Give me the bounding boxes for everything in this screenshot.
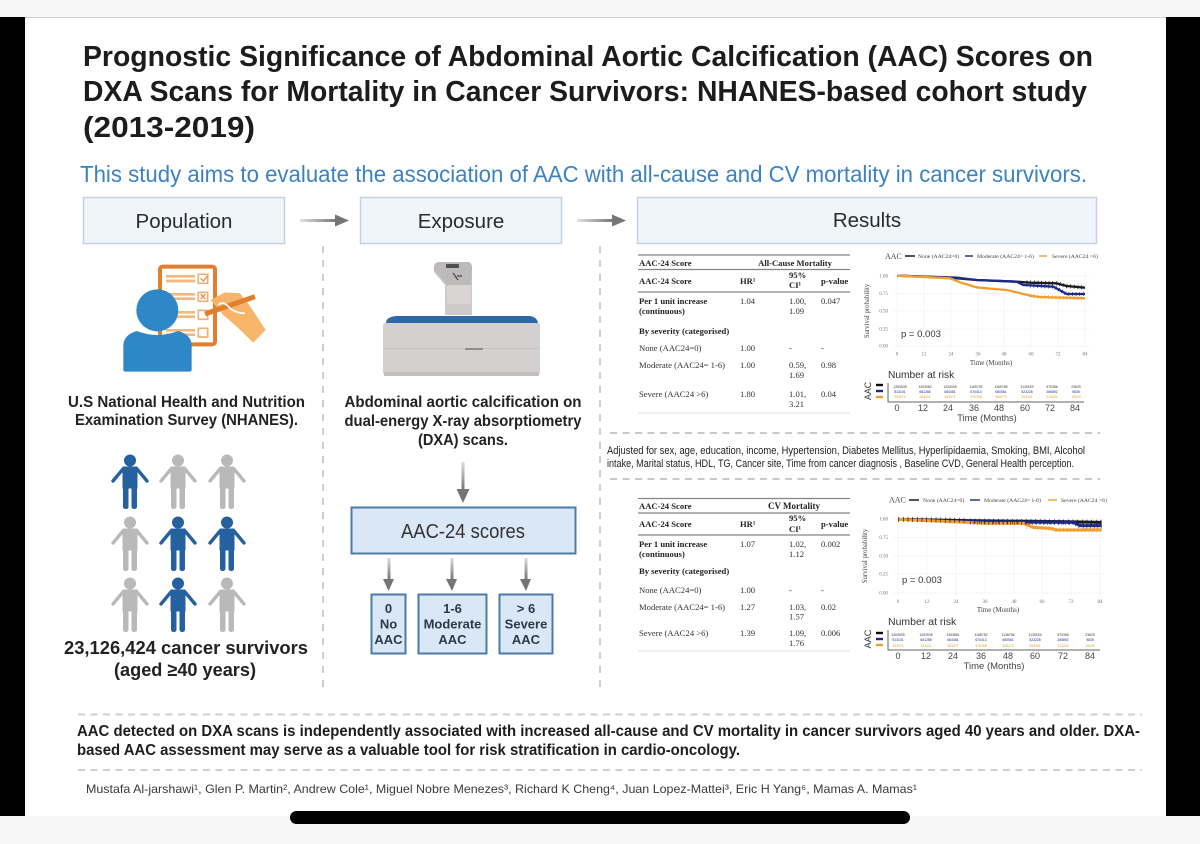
table: all-cause mortality: By severity (categorised) [639,326,729,336]
table: all-cause mortality: 95% [789,270,806,280]
table: CV mortality: 1.12 [789,549,804,559]
chart: all-cause survival curves: 24 [948,352,954,358]
heading: population [84,198,284,244]
table: all-cause mortality: CI¹ [789,280,802,290]
chart: CV survival curves: 24 [954,600,959,605]
icon: nine people pictogram [113,455,244,632]
category: severe AAC [500,594,552,654]
table: all-cause mortality: 1.69 [789,370,804,380]
table: CV mortality: AAC-24 Score [639,501,692,511]
category: moderate AAC: AAC [438,632,467,647]
table: all-cause mortality: All-Cause Mortality [758,258,833,268]
risk table: all-cause: 308170 [995,395,1007,399]
risk table: CV: 1253939 [919,633,933,637]
risk table: CV: 0 [895,651,901,661]
table: CV mortality: - [821,585,824,595]
chart: CV survival curves: Moderate (AAC24= 1-6) [984,497,1041,504]
risk table: CV: 24 [948,651,958,661]
risk table: all-cause: 263571 [944,395,956,399]
risk table: all-cause: Time (Months) [957,413,1017,423]
chart: CV survival curves: 12 [924,600,930,605]
cohort size: (aged ≥40 years) [114,659,256,680]
chart: all-cause survival curves: AAC [885,252,902,261]
chart: CV survival curves: 60 [1040,600,1045,605]
risk table: all-cause: 681285 [919,390,931,394]
chart: CV survival curves: 0.00 [879,592,888,596]
table: all-cause mortality: Moderate (AAC24= 1-6) [639,360,725,370]
risk table: CV: 664481 [947,638,959,642]
heading: results: Results [833,209,901,232]
table: CV mortality: 0.02 [821,602,836,612]
risk table: all-cause: 72 [1045,403,1055,413]
chart: all-cause survival curves [864,252,1098,367]
table: all-cause mortality: - [789,343,792,353]
risk table: CV: 1138756 [1002,633,1015,637]
category: moderate AAC: Moderate [424,616,481,632]
table: CV mortality: By severity (categorised) [639,566,729,576]
chart: all-cause survival curves: 36 [976,352,981,358]
chart: CV survival curves: p = 0.003 [902,575,942,586]
table: all-cause mortality: (continuous) [639,306,685,316]
risk table: CV: 263341 [1029,644,1041,648]
risk table: all-cause: 263974 [894,395,906,399]
category: severe AAC: Severe [505,616,547,632]
exposure description: dual-energy X-ray absorptiometry [344,413,582,430]
table: CV mortality: Per 1 unit increase [639,539,707,549]
chart: all-cause survival curves: 0.50 [879,310,888,314]
table: CV mortality: Severe (AAC24 >6) [639,628,708,638]
heading: exposure [360,198,562,244]
risk table: all-cause: 1203409 [943,385,957,389]
risk table: all-cause: 664481 [944,390,956,394]
category: severe AAC: AAC [512,632,541,647]
chart: CV survival curves: AAC [889,496,906,504]
table: CV mortality: 1.02, [789,539,806,549]
risk table: all-cause: AAC [863,381,873,400]
table: CV mortality: 1.00 [740,585,755,595]
risk table: all-cause: 1169789 [995,385,1008,389]
heading: results [638,198,1096,244]
risk table: CV: 213434 [1057,644,1069,648]
table: CV mortality: 95% [789,513,806,523]
exposure description [344,394,582,449]
risk table: CV: 48 [1003,651,1013,661]
category: no AAC: AAC [374,632,403,647]
table: all-cause mortality: 1.00 [740,360,755,370]
risk table: CV: 263411 [920,644,932,648]
risk table: CV: 376368 [975,644,987,648]
risk table: all-cause: 813101 [894,390,906,394]
study aim subtitle: This study aims to evaluate the association of AAC with all-cause and CV mortality in cancer survivors. [80,161,1087,187]
chart: all-cause survival curves: Moderate (AAC24= 1-6) [977,253,1034,260]
exposure description: (DXA) scans. [418,432,508,449]
table: all-cause mortality: 1.01, [789,389,806,399]
risk table: CV: 813101 [892,638,904,642]
table: all-cause mortality: p-value [821,276,848,286]
risk table: all-cause: 670413 [970,390,982,394]
chart: all-cause survival curves: p = 0.003 [901,329,941,340]
table: CV mortality: HR¹ [740,519,756,529]
chart: CV survival curves: 1.00 [879,518,888,522]
risk table: CV: 72 [1058,651,1068,661]
table: CV mortality: None (AAC24=0) [639,585,702,595]
category: severe AAC: > 6 [517,601,535,616]
chart: CV survival curves: Time (Months) [977,606,1020,614]
chart: all-cause survival curves: Survival probability [864,283,871,338]
table: CV mortality: 0.002 [821,539,840,549]
chart: CV survival curves: None (AAC24=0) [923,497,964,504]
title [83,41,1093,144]
icon: DXA scanner [383,262,540,376]
table: all-cause mortality: 0.04 [821,389,837,399]
risk table: CV: 36 [976,651,986,661]
risk table: CV: 84 [1085,651,1095,661]
table: all-cause mortality: AAC-24 Score [639,276,692,286]
risk table: all-cause: 0 [894,403,900,413]
population description: U.S National Health and Nutrition [68,394,305,411]
risk table: CV: 12 [921,651,931,661]
title: DXA Scans for Mortality in Cancer Survivors: NHANES-based cohort study [83,76,1087,108]
chart: CV survival curves: 72 [1068,600,1074,605]
table: all-cause mortality: Per 1 unit increase [639,296,707,306]
chart: all-cause survival curves: None (AAC24=0) [918,253,959,260]
risk table: CV: 650561 [1002,638,1014,642]
table: all-cause mortality: 3.21 [789,399,804,409]
chart: all-cause survival curves: 0.00 [879,344,888,350]
table: CV mortality: 1.57 [789,612,805,622]
table: all-cause mortality: 1.04 [740,296,756,306]
table: CV mortality: AAC-24 Score [639,519,692,529]
risk table: all-cause: 263411 [919,395,931,399]
title: (2013-2019) [83,112,255,144]
risk table: all-cause: 1130929 [1021,385,1034,389]
table: CV mortality: 1.07 [740,539,756,549]
cohort size [64,637,308,680]
conclusion: based AAC assessment may serve as a valuable tool for risk stratification in cardio-oncology. [77,742,740,759]
table: CV mortality: p-value [821,519,848,529]
table: CV mortality: CV Mortality [768,501,821,511]
risk table: all-cause: 650561 [995,390,1007,394]
adjustment footnote [607,445,1085,470]
risk table: all-cause: 9835 [1072,390,1080,394]
chart: CV survival curves: 36 [982,600,988,605]
chart: all-cause survival curves: Time (Months) [970,359,1013,367]
chart: all-cause survival curves: 72 [1056,352,1061,358]
risk table: CV: Number at risk [888,616,957,628]
icon: person completing a checklist [123,267,266,372]
table: CV mortality [638,498,850,651]
table: CV mortality: (continuous) [639,549,685,559]
table: all-cause mortality: - [821,343,824,353]
table: CV mortality: 1.27 [740,602,756,612]
table: all-cause mortality: 0.59, [789,360,806,370]
table: CV mortality: CI¹ [789,524,802,534]
conclusion: AAC detected on DXA scans is independently associated with increased all-cause and CV mortality in cancer survivors aged 40 years and older. DXA- [77,723,1140,740]
table: all-cause mortality [638,255,850,413]
risk table: all-cause: 265892 [1046,390,1058,394]
chart: all-cause survival curves: 48 [1002,352,1007,358]
risk table: CV: 570356 [1057,633,1069,637]
risk table: CV: 263571 [947,644,959,648]
risk table: all-cause [863,370,1084,423]
chart: all-cause survival curves: 60 [1028,352,1034,358]
risk table: all-cause: 12 [918,403,928,413]
risk table: CV: 23629 [1085,633,1095,637]
risk table: all-cause: 24 [943,403,953,413]
risk table: all-cause: 60 [1020,403,1030,413]
risk table: CV: 19630 [1085,644,1095,648]
risk table: all-cause: 213434 [1046,395,1058,399]
table: all-cause mortality: 1.09 [789,306,804,316]
table: all-cause mortality: 1.00 [740,343,755,353]
box: AAC-24 scores: AAC-24 scores [401,520,525,543]
chart: CV survival curves: Severe (AAC24 >6) [1061,497,1107,504]
chart: CV survival curves: 0 [897,600,900,605]
population description: Examination Survey (NHANES). [75,412,298,429]
risk table: CV: 60 [1030,651,1040,661]
chart: CV survival curves: 0.75 [879,536,888,541]
table: CV mortality: Moderate (AAC24= 1-6) [639,602,725,612]
arrow: down to AAC-24 scores [456,462,470,503]
risk table: CV: AAC [863,629,873,648]
table: CV mortality: 0.006 [821,628,841,638]
exposure description: Abdominal aortic calcification on [344,394,582,411]
population description [68,394,305,429]
chart: all-cause survival curves: 0.75 [879,292,888,297]
risk table: CV: 1263539 [891,633,905,637]
table: all-cause mortality: 0.047 [821,296,841,306]
table: all-cause mortality: 1.00, [789,296,806,306]
risk table: all-cause: 19630 [1071,395,1081,399]
heading: population: Population [136,210,232,233]
title: Prognostic Significance of Abdominal Aortic Calcification (AAC) Scores on [83,41,1093,73]
risk table: CV: 1168752 [975,633,988,637]
chart: all-cause survival curves: Severe (AAC24 >6) [1052,253,1098,260]
table: CV mortality: 1.39 [740,628,755,638]
table: all-cause mortality: HR¹ [740,276,756,286]
risk table: all-cause: Number at risk [888,370,955,381]
conclusion [77,723,1140,759]
table: all-cause mortality: None (AAC24=0) [639,343,702,353]
risk table: all-cause: 48 [994,403,1004,413]
risk table: all-cause: 523228 [1021,390,1033,394]
risk table: all-cause: 263341 [1021,395,1033,399]
chart: all-cause survival curves: 0.25 [879,328,888,332]
risk table: all-cause: 1263539 [893,385,907,389]
authors: Mustafa Al-jarshawi¹, Glen P. Martin², Andrew Cole¹, Miguel Nobre Menezes³, Richard K Cheng⁴, Juan Lopez-Mattei³, Eric H Yang⁶, Mamas A. Mamas¹ [86,782,917,796]
arrow: exposure to results [577,214,626,226]
arrow: population to exposure [300,214,349,226]
category: moderate AAC: 1-6 [443,601,462,616]
table: all-cause mortality: 1.80 [740,389,755,399]
risk table: CV: 1130925 [1029,633,1042,637]
table: CV mortality: 1.09, [789,628,806,638]
chart: all-cause survival curves: 12 [922,352,927,358]
category: no AAC [372,594,406,654]
risk table: CV: 661285 [920,638,932,642]
chart: CV survival curves: 84 [1098,600,1103,605]
table: all-cause mortality: 0.98 [821,360,836,370]
risk table: all-cause: 84 [1070,403,1080,413]
cohort size: 23,126,424 cancer survivors [64,637,308,658]
risk table: CV: 523228 [1029,638,1041,642]
chart: CV survival curves: 0.25 [879,572,888,578]
risk table: CV: 1263881 [946,633,960,637]
adjustment footnote: intake, Marital status, HDL, TG, Cancer site, Time from cancer diagnosis , Baseline CVD, General Health perception. [607,458,1074,470]
adjustment footnote: Adjusted for sex, age, education, income, Hypertension, Diabetes Mellitus, Hyperlipidaemia, Smoking, BMI, Alcohol [607,445,1085,457]
category: moderate AAC [418,594,486,654]
risk table: CV: 263974 [892,644,904,648]
box: AAC-24 scores [352,508,576,554]
table: CV mortality: 1.03, [789,602,806,612]
table: all-cause mortality: AAC-24 Score [639,258,692,268]
risk table: CV: 265892 [1057,638,1069,642]
chart: CV survival curves: 48 [1012,600,1017,605]
risk table: all-cause: 376368 [970,395,982,399]
risk table: all-cause: 36 [969,403,979,413]
risk table: all-cause: 23629 [1071,385,1081,389]
table: CV mortality: 1.76 [789,638,805,648]
category: no AAC: No [380,616,397,632]
chart: CV survival curves: 0.50 [879,554,888,560]
chart: all-cause survival curves: 84 [1082,352,1088,358]
risk table: all-cause: 1169792 [970,385,983,389]
chart: CV survival curves: Survival probability [862,528,869,583]
risk table: all-cause: 1203082 [918,385,932,389]
chart: CV survival curves [862,496,1107,614]
risk table: CV: 308170 [1002,644,1014,648]
risk table: CV [863,616,1100,672]
risk table: CV: 9835 [1086,638,1094,642]
heading: exposure: Exposure [418,210,504,233]
chart: all-cause survival curves: 1.00 [879,274,888,280]
table: all-cause mortality: Severe (AAC24 >6) [639,389,708,399]
category: no AAC: 0 [385,601,392,616]
chart: all-cause survival curves: 0 [896,352,899,358]
table: CV mortality: - [789,585,792,595]
arrows: scores to categories [383,558,531,591]
risk table: CV: Time (Months) [964,661,1024,672]
risk table: CV: 670413 [975,638,987,642]
risk table: all-cause: 570356 [1046,385,1058,389]
